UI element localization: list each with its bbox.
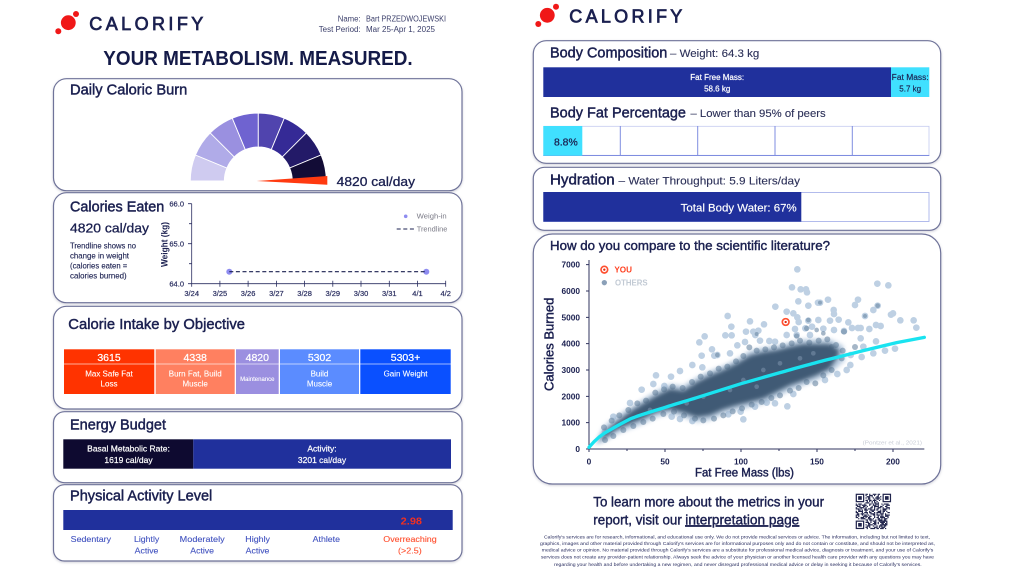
- weight chart: Trendline: [417, 224, 447, 233]
- bar segment: activity: Activity:: [307, 444, 337, 454]
- activity level labels: [71, 534, 437, 555]
- heading: energy budget: Energy Budget: [70, 417, 166, 433]
- y axis tick labels: 4000: [561, 339, 580, 349]
- weight chart: Weigh-in: [417, 212, 447, 221]
- weight chart: 66.0: [169, 199, 184, 208]
- legal disclaimer: Calorify's services are for research, informational, and educational use only. We do not provide medical services or advice. The information, including but not limited to text,: [544, 534, 930, 539]
- weight chart: 4/2: [440, 289, 451, 298]
- heading: physical activity level: Physical Activity Level: [70, 489, 212, 505]
- activity level labels: Highly: [245, 534, 271, 544]
- legal disclaimer: [540, 534, 935, 567]
- objective: burn fat build muscle: Muscle: [183, 380, 208, 389]
- panel: physical activity level: [54, 485, 462, 561]
- objective: burn fat build muscle: Burn Fat, Build: [169, 369, 222, 378]
- trendline note: [70, 241, 137, 281]
- QR code: [856, 494, 891, 528]
- activity bar: 2.98: [401, 516, 422, 528]
- activity bar: [63, 510, 453, 530]
- x axis tick labels: 100: [734, 457, 748, 467]
- logo: right page: [535, 4, 682, 27]
- weight chart: [160, 199, 451, 298]
- legal disclaimer: regarding your health and before undertaking a new regimen, and never disregard professional medical advice or delay in seeking it because of Calorify's services.: [554, 562, 922, 567]
- heading: body fat percentage: Body Fat Percentage: [550, 105, 686, 121]
- trendline note: Trendline shows no: [70, 241, 137, 250]
- objective: max safe fat loss: 3615: [97, 352, 121, 364]
- trendline note: calories burned): [70, 272, 127, 281]
- bar segment: activity: 3201 cal/day: [298, 455, 347, 465]
- logo: left page: [55, 11, 203, 34]
- weight chart: 3/28: [297, 289, 312, 298]
- trend curve: [589, 337, 924, 447]
- bar segment: fat mass: Fat Mass:: [892, 73, 929, 82]
- dense core of the data cloud: [598, 344, 839, 441]
- logo: right page: CALORIFY: [569, 7, 682, 27]
- panel: daily caloric burn: [54, 79, 462, 191]
- legend: [601, 265, 648, 288]
- objective: burn fat build muscle: 4338: [184, 352, 207, 364]
- bar segment: basal metabolic rate: Basal Metabolic Rate:: [87, 444, 170, 454]
- report details: Test Period:: [319, 25, 361, 34]
- y axis tick labels: 6000: [561, 286, 580, 296]
- panel: scientific literature comparison: [533, 234, 941, 484]
- heading: body composition: Body Composition: [550, 45, 667, 61]
- objective: max safe fat loss: [64, 349, 154, 394]
- marker: your data point: [782, 319, 789, 325]
- bar segment: basal metabolic rate: [63, 439, 193, 469]
- weight chart: 3/24: [184, 289, 199, 298]
- objective: maintenance: 4820: [246, 352, 269, 364]
- source note: (Pontzer et al., 2021): [863, 440, 922, 446]
- weight chart: 3/25: [213, 289, 227, 298]
- y axis tick labels: 0: [575, 444, 580, 454]
- calories eaten value: 4820 cal/day: [70, 220, 150, 235]
- call to action: To learn more about the metrics in your: [593, 495, 824, 510]
- axes: [586, 260, 924, 452]
- objective: max safe fat loss: Loss: [101, 380, 117, 389]
- call to action: [593, 495, 824, 527]
- bar segment: fat mass: [891, 67, 929, 97]
- bar segment: basal metabolic rate: 1619 cal/day: [104, 455, 153, 465]
- x axis tick labels: 150: [810, 457, 824, 467]
- heading: scientific comparison: How do you compare to the scientific literature?: [550, 239, 830, 253]
- activity level labels: Moderately: [180, 534, 225, 544]
- legend: YOU: [614, 265, 632, 275]
- activity level labels: Active: [190, 545, 214, 555]
- y axis tick labels: 5000: [561, 312, 580, 322]
- panel: energy budget: [54, 412, 462, 483]
- bar segment: activity: [193, 439, 451, 469]
- activity level labels: Active: [246, 545, 270, 555]
- total body water bar: Total Body Water: 67%: [681, 203, 797, 215]
- report details: [319, 14, 446, 34]
- heading: calories eaten: Calories Eaten: [70, 199, 164, 215]
- objective: gain weight: [360, 349, 451, 394]
- legend: OTHERS: [615, 278, 648, 288]
- bar segment: fat mass: 5.7 kg: [899, 85, 921, 94]
- scatter chart: [542, 260, 924, 480]
- y axis tick labels: 1000: [561, 418, 580, 428]
- panel: body composition: [533, 41, 941, 163]
- heading: daily caloric burn: Daily Caloric Burn: [70, 83, 187, 99]
- bar segment: fat free mass: Fat Free Mass:: [690, 73, 744, 82]
- gauge needle: [257, 176, 327, 185]
- objective: build muscle: Build: [311, 369, 328, 378]
- objective: burn fat build muscle: [156, 349, 235, 394]
- objective: gain weight: Gain Weight: [384, 369, 428, 378]
- objective: maintenance: Maintenance: [240, 377, 275, 383]
- report details: Bart PRZEDWOJEWSKI: [366, 14, 446, 23]
- logo: left page: CALORIFY: [89, 14, 203, 34]
- weight chart: 3/26: [241, 289, 255, 298]
- heading: calorie intake: Calorie Intake by Objective: [68, 317, 245, 333]
- objective: max safe fat loss: Max Safe Fat: [85, 369, 134, 378]
- gauge value: 4820 cal/day: [337, 174, 416, 189]
- weight chart: 3/30: [354, 289, 368, 298]
- legal disclaimer: services does not create any provider-patient relationship. Always seek the advice of your physician or another licensed health care provider with any questions you may have: [541, 555, 934, 560]
- report details: Name:: [338, 14, 361, 23]
- y axis tick labels: [561, 260, 580, 454]
- weight chart: 4/1: [412, 289, 423, 298]
- title: YOUR METABOLISM. MEASURED.: [103, 48, 413, 70]
- activity level labels: Lightly: [134, 534, 160, 544]
- panel: calories eaten: [54, 193, 462, 303]
- bar segment: fat free mass: [543, 67, 891, 97]
- objective: maintenance: [236, 349, 279, 394]
- objective: build muscle: 5302: [308, 352, 331, 364]
- x axis tick labels: 200: [886, 457, 900, 467]
- weight chart: Weight (kg): [160, 222, 170, 267]
- weight chart: 65.0: [169, 239, 184, 248]
- body fat scale: [543, 126, 929, 156]
- weight chart: 3/31: [382, 289, 397, 298]
- panel: calorie intake by objective: [54, 306, 462, 409]
- x axis tick labels: [587, 457, 900, 467]
- weight chart: 3/29: [325, 289, 340, 298]
- objective: build muscle: [280, 349, 359, 394]
- activity level labels: Overreaching: [383, 534, 437, 544]
- y axis tick labels: 7000: [561, 260, 580, 270]
- trendline note: (calories eaten =: [70, 262, 128, 271]
- activity level labels: Active: [135, 545, 159, 555]
- legal disclaimer: medical advice or opinion. No material provided through Calorify's services are a substitute for professional medical advice, diagnosis or treatment, and your use of Calorify's: [542, 548, 934, 553]
- y axis title: Calories Burned: [542, 298, 556, 391]
- objective: gain weight: 5303+: [391, 352, 420, 364]
- weight summary: – Weight: 64.3 kg: [670, 48, 759, 60]
- activity level labels: Athlete: [313, 534, 340, 544]
- weight chart: 64.0: [169, 279, 184, 288]
- body fat scale: 8.8%: [554, 137, 578, 148]
- water throughput: – Water Throughput: 5.9 Liters/day: [618, 176, 801, 188]
- call to action: interpretation page: [685, 512, 799, 527]
- total body water bar: [543, 192, 929, 222]
- bar segment: fat free mass: 58.6 kg: [704, 85, 730, 94]
- call to action: report, visit our: [593, 512, 682, 527]
- y axis tick labels: 3000: [561, 365, 580, 375]
- trendline note: change in weight: [70, 252, 130, 261]
- panel: hydration: [533, 167, 941, 230]
- peer comparison: – Lower than 95% of peers: [690, 108, 826, 120]
- mid-tone points along the cloud edge: [601, 301, 880, 443]
- x axis tick labels: 0: [587, 457, 592, 467]
- heading: hydration: Hydration: [550, 173, 615, 189]
- x axis title: Fat Free Mass (lbs): [695, 466, 794, 480]
- report details: Mar 25-Apr 1, 2025: [366, 25, 436, 34]
- objective: build muscle: Muscle: [307, 380, 333, 389]
- y axis tick labels: 2000: [561, 391, 580, 401]
- activity level labels: Sedentary: [71, 534, 112, 544]
- gauge chart: [190, 113, 326, 181]
- weight chart: 3/27: [269, 289, 284, 298]
- legal disclaimer: graphics, images and other material provided through Calorify's services are for informational purposes only and do not contain or constitute, and should not be interpreted as,: [540, 541, 935, 546]
- activity level labels: (>2.5): [398, 545, 422, 555]
- x axis tick labels: 50: [660, 457, 670, 467]
